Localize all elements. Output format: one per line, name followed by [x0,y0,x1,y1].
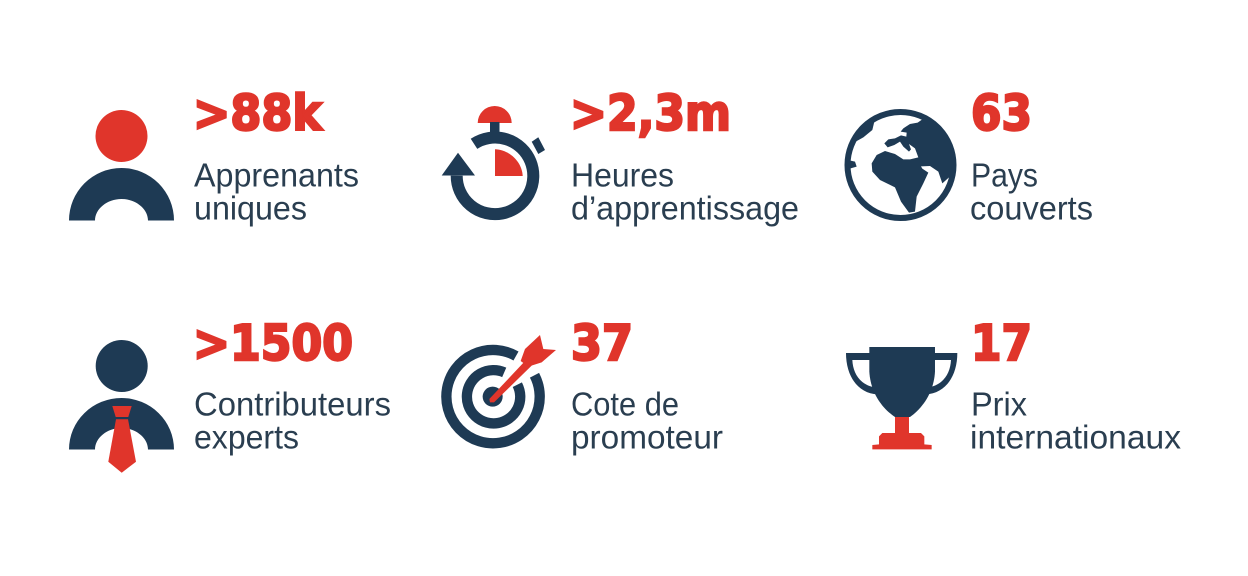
stat: learners value: >88k [193,85,323,142]
label: score: Cote de [571,386,679,423]
icon: trophy [846,347,957,449]
icon: globe [845,107,968,218]
stat: countries value: 63 [971,85,1032,142]
panel: unique learners [69,85,359,226]
label: unique: uniques [194,189,307,226]
label: international: internationaux [970,418,1181,455]
stat: promoter value: 37 [571,315,633,372]
label: awards: Prix [971,386,1027,423]
icon: expert with tie [69,340,174,473]
panel: promoter score [446,315,723,455]
label: learners: Apprenants [194,157,359,194]
label: contributors: Contributeurs [194,386,391,423]
stat: hours value: >2,3m [570,85,731,142]
label: countries: Pays [971,157,1038,194]
label: covered: couverts [970,189,1093,226]
icon: stopwatch [442,106,545,214]
icon: target with arrow [446,335,556,443]
stat: contributors value: >1500 [193,315,353,372]
label: promoter: promoteur [571,418,723,455]
label: experts: experts [194,418,299,455]
label: hours: Heures [571,157,674,194]
stat: awards value: 17 [971,315,1032,372]
panel: learning hours [442,85,799,226]
label: of learning: d’apprentissage [571,189,799,226]
panel: countries covered [845,85,1093,226]
panel: expert contributors [69,315,391,473]
panel: international awards [846,315,1181,455]
icon: learner [69,110,174,220]
